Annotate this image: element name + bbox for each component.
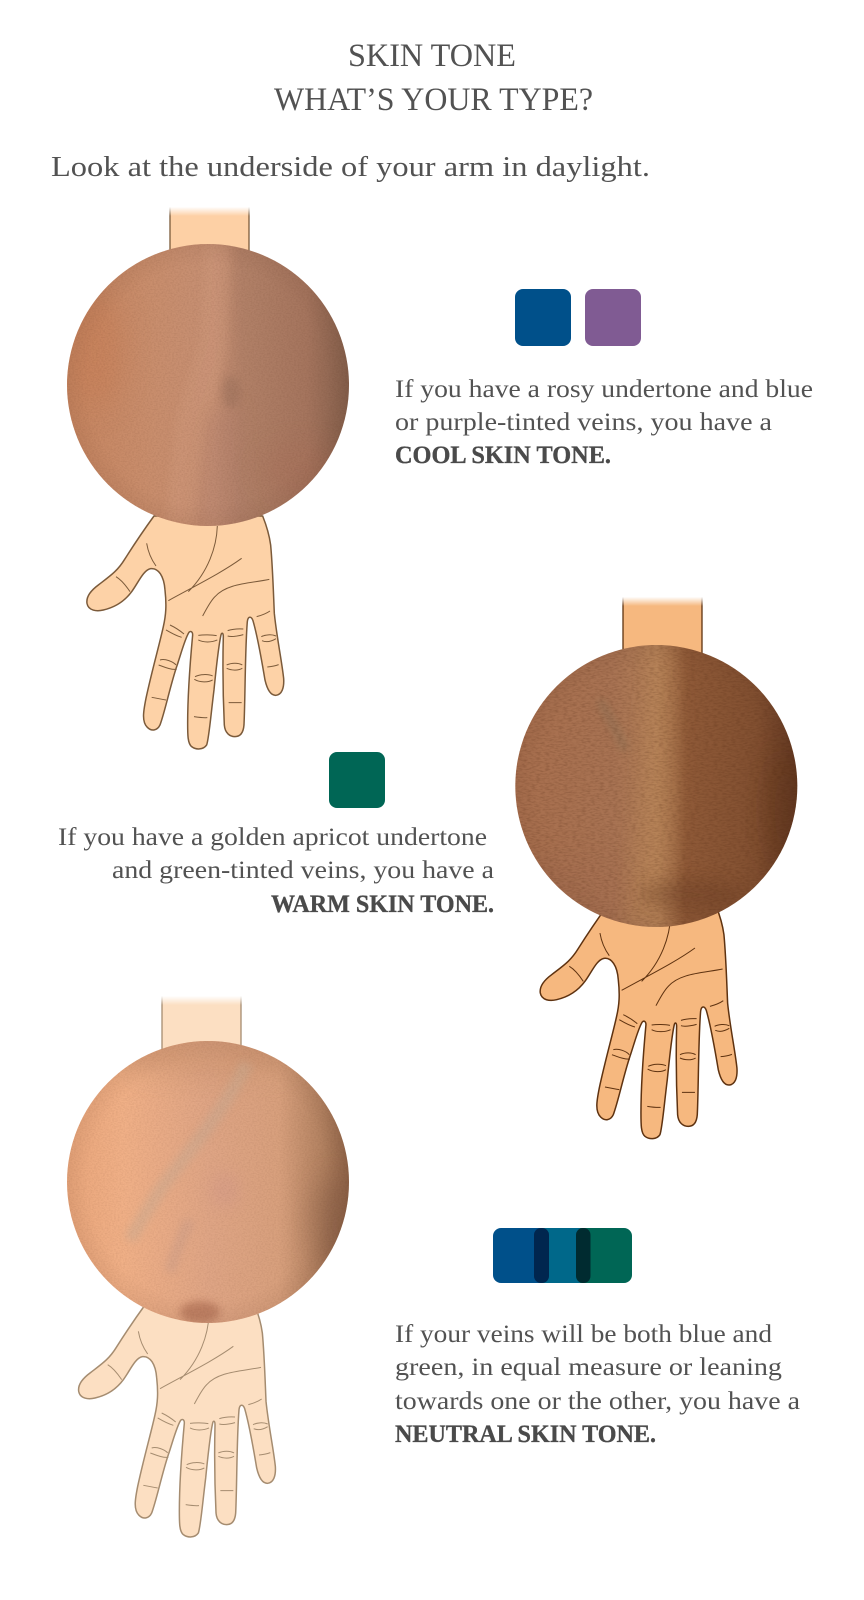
skin photo circle: warm <box>515 645 805 928</box>
skin photo circle: cool <box>67 244 349 526</box>
arm: cool <box>165 202 255 266</box>
text: cool description: or purple-tinted veins, you have a <box>395 409 772 436</box>
text: neutral description: green, in equal measure or leaning <box>395 1354 783 1381</box>
color swatch: blue-to-green blend <box>493 1228 632 1283</box>
arm: warm <box>618 592 708 656</box>
color swatch: green <box>329 752 385 808</box>
instruction text: Look at the underside of your arm in daylight. <box>51 151 650 183</box>
skin photo circle: neutral <box>67 1033 357 1323</box>
text: warm description <box>58 824 494 918</box>
text: warm description: If you have a golden apricot undertone <box>58 824 487 851</box>
hand illustration: warm <box>540 906 737 1139</box>
title: SKIN TONE <box>348 38 516 74</box>
hand illustration: cool <box>87 516 284 749</box>
text: warm description: WARM SKIN TONE. <box>271 891 494 918</box>
hand illustration: neutral <box>79 1304 275 1537</box>
text: neutral description: NEUTRAL SKIN TONE. <box>395 1421 656 1448</box>
text: cool description: COOL SKIN TONE. <box>395 442 611 469</box>
text: cool description: If you have a rosy undertone and blue <box>395 376 813 403</box>
text: neutral description <box>395 1321 800 1448</box>
panel: cool skin tone <box>67 202 813 749</box>
text: neutral description: If your veins will be both blue and <box>395 1321 773 1348</box>
color swatch: purple <box>585 289 641 346</box>
panel: warm skin tone <box>58 592 805 1139</box>
title <box>274 38 593 118</box>
text: warm description: and green-tinted veins, you have a <box>112 857 494 884</box>
text: neutral description: towards one or the other, you have a <box>395 1388 800 1415</box>
text: cool description <box>395 376 813 469</box>
arm: neutral <box>157 991 247 1055</box>
color swatch: blue <box>515 289 571 346</box>
panel: neutral skin tone <box>67 991 800 1537</box>
title: WHAT’S YOUR TYPE? <box>274 82 593 118</box>
